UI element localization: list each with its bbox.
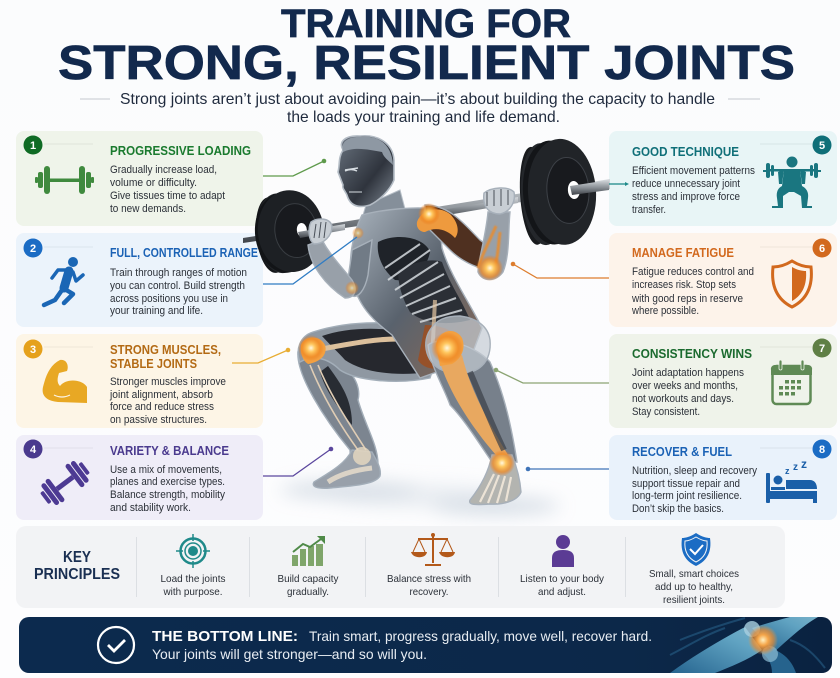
icon: balance scales xyxy=(411,533,455,565)
badge 8: 8 xyxy=(819,444,825,456)
body text: Fatigue reduces control and xyxy=(632,266,754,278)
title: TRAINING FOR xyxy=(281,2,571,46)
body text xyxy=(632,367,744,418)
principle text 5 xyxy=(649,568,739,606)
body text xyxy=(110,464,225,514)
body text: Train through ranges of motion xyxy=(110,267,247,279)
body text: Efficient movement patterns xyxy=(632,165,755,177)
subtitle: Strong joints aren’t just about avoiding pain—it’s about building the capacity to handle xyxy=(120,91,715,108)
body text: across positions you use in xyxy=(110,293,228,305)
badge 2: 2 xyxy=(30,243,36,255)
panel 6: manage fatigue xyxy=(609,233,837,327)
icon: shield xyxy=(773,261,811,307)
principle text 2 xyxy=(278,573,339,598)
body text xyxy=(110,164,225,215)
body text: Nutrition, sleep and recovery xyxy=(632,465,757,477)
icon: rising bars chart xyxy=(292,536,325,566)
badge 3: 3 xyxy=(30,344,36,356)
body text xyxy=(632,465,757,515)
heading: CONSISTENCY WINS xyxy=(632,347,752,361)
joint glows xyxy=(298,203,515,476)
heading: GOOD TECHNIQUE xyxy=(632,145,739,159)
rear leg xyxy=(298,322,445,488)
panel 7: consistency wins xyxy=(609,334,837,428)
panel 5: good technique xyxy=(609,131,837,226)
heading xyxy=(110,343,221,371)
body text xyxy=(631,266,754,317)
heading: VARIETY & BALANCE xyxy=(110,444,229,458)
body text: force and reduce stress xyxy=(110,401,214,413)
arms xyxy=(308,188,514,298)
body text: reduce unnecessary joint xyxy=(632,178,740,190)
icon: person xyxy=(552,535,574,567)
body text: over weeks and months, xyxy=(632,380,738,392)
key principles heading xyxy=(34,549,120,583)
body text: stress and improve force xyxy=(632,191,740,203)
body text: Use a mix of movements, xyxy=(110,464,222,476)
heading: MANAGE FATIGUE xyxy=(632,246,734,260)
principle text 3: recovery. xyxy=(410,586,448,598)
bottom line text: THE BOTTOM LINE: xyxy=(152,628,298,645)
body text: Give tissues time to adapt xyxy=(110,190,225,202)
heading: PROGRESSIVE LOADING xyxy=(110,144,251,158)
principle text 5: Small, smart choices xyxy=(649,568,739,580)
panel: key principles xyxy=(16,526,785,608)
icon: flexed arm xyxy=(43,360,87,403)
head xyxy=(338,136,394,207)
body text: where possible. xyxy=(631,305,699,317)
badge 5 xyxy=(812,136,832,154)
body text: support tissue repair and xyxy=(632,478,740,490)
icon: bed with zzz xyxy=(766,457,817,503)
badge 5: 5 xyxy=(819,140,825,152)
principle text 3 xyxy=(387,573,471,598)
badge 6: 6 xyxy=(819,243,825,255)
badge 7 xyxy=(812,338,832,358)
body text: your training and life. xyxy=(110,305,203,317)
body text: and stability work. xyxy=(110,502,191,514)
body text: not workouts and days. xyxy=(632,393,734,405)
panel 2: full controlled range xyxy=(16,233,263,327)
badge 2 xyxy=(24,238,42,258)
badge 7: 7 xyxy=(819,343,825,355)
body text: volume or difficulty. xyxy=(110,177,197,189)
body text: you can control. Build strength xyxy=(110,280,245,292)
principle text 4 xyxy=(520,573,605,598)
principle text 1: with purpose. xyxy=(163,586,222,598)
badge 6 xyxy=(812,238,832,258)
icon: check shield xyxy=(682,533,710,566)
body text: Joint adaptation happens xyxy=(632,367,744,379)
barbell xyxy=(243,137,610,276)
body text: joint alignment, absorb xyxy=(109,389,213,401)
icon: squat figure xyxy=(763,156,821,208)
body text: increases risk. Stop sets xyxy=(632,279,736,291)
heading: STRONG MUSCLES, xyxy=(110,343,221,357)
body text xyxy=(109,376,226,426)
banner: the bottom line xyxy=(19,617,832,673)
subtitle: the loads your training and life demand. xyxy=(287,109,560,126)
knee illustration xyxy=(670,617,825,673)
principle text 4: Listen to your body xyxy=(520,573,605,585)
central figure: squatting athlete with barbell xyxy=(243,136,610,515)
principle text 3: Balance stress with xyxy=(387,573,471,585)
body text: long-term joint resilience. xyxy=(632,490,742,502)
icon: dumbbell xyxy=(36,456,94,510)
principle text 1 xyxy=(160,573,226,598)
title: STRONG, RESILIENT JOINTS xyxy=(58,37,795,90)
body text: Balance strength, mobility xyxy=(110,489,225,501)
floor shadow xyxy=(280,481,560,515)
bottom line text: Train smart, progress gradually, move well, recover hard. xyxy=(309,628,652,644)
principle text 4: and adjust. xyxy=(538,586,586,598)
principle text 1: Load the joints xyxy=(160,573,226,585)
heading: RECOVER & FUEL xyxy=(632,445,732,459)
icon: bed with zzz: z xyxy=(793,462,798,473)
badge 1 xyxy=(24,136,42,154)
body text: transfer. xyxy=(632,204,666,216)
bottom line text: Your joints will get stronger—and so will you. xyxy=(152,646,427,662)
key principles heading: PRINCIPLES xyxy=(34,566,120,583)
connector lines xyxy=(232,159,629,476)
subtitle xyxy=(80,91,760,126)
body text: Gradually increase load, xyxy=(110,164,217,176)
heading: FULL, CONTROLLED RANGE xyxy=(110,246,258,260)
principle text 5: resilient joints. xyxy=(663,594,725,606)
body text: Don’t skip the basics. xyxy=(632,503,724,515)
icon: check circle xyxy=(98,627,134,663)
body text: planes and exercise types. xyxy=(110,476,225,488)
panel 8: recover and fuel xyxy=(609,435,837,520)
bottom line text xyxy=(152,628,652,662)
key principles heading: KEY xyxy=(63,549,91,566)
principle text 5: add up to healthy, xyxy=(655,581,733,593)
badge 1: 1 xyxy=(30,140,36,152)
icon: target xyxy=(176,534,210,568)
body text xyxy=(632,165,755,216)
icon: bed with zzz: z xyxy=(785,466,790,476)
body text: with good reps in reserve xyxy=(631,293,743,305)
badge 4 xyxy=(24,440,42,458)
principle text 2: gradually. xyxy=(287,586,329,598)
icon: barbell xyxy=(35,166,94,194)
icon: bed with zzz: z xyxy=(801,457,807,471)
body text: to new demands. xyxy=(110,203,186,215)
body text: Stay consistent. xyxy=(632,406,700,418)
front leg xyxy=(426,316,521,505)
principle text 2: Build capacity xyxy=(278,573,339,585)
panel 4: variety and balance xyxy=(16,435,263,520)
heading: STABLE JOINTS xyxy=(110,357,197,371)
panel 1: progressive loading xyxy=(16,131,263,226)
body text xyxy=(110,267,247,317)
body text: Stronger muscles improve xyxy=(110,376,226,388)
panel 3: strong muscles xyxy=(16,334,263,428)
badge 8 xyxy=(812,440,832,458)
badge 3 xyxy=(24,340,42,358)
title xyxy=(58,2,795,90)
icon: calendar xyxy=(771,360,812,404)
torso xyxy=(350,190,482,378)
body text: on passive structures. xyxy=(110,414,207,426)
icon: runner xyxy=(44,257,83,305)
badge 4: 4 xyxy=(30,444,37,456)
